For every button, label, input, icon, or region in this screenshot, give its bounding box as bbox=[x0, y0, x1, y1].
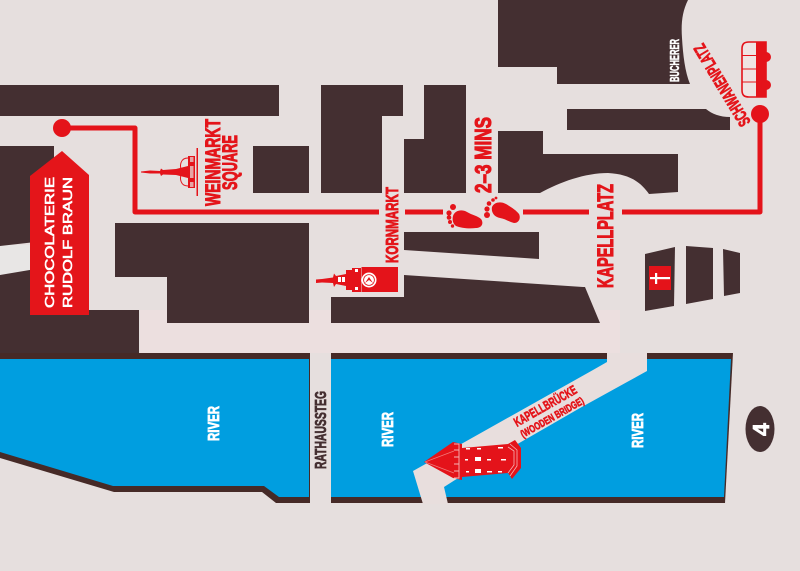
icon: church marker bbox=[649, 266, 671, 290]
rathaussteg label: RATHAUSSTEG bbox=[313, 391, 330, 469]
kapellplatz label: KAPELLPLATZ bbox=[593, 184, 618, 288]
buildings bbox=[0, 0, 740, 353]
river with banks bbox=[0, 353, 733, 503]
chocolaterie tag bbox=[30, 151, 89, 315]
kornmarkt label: KORNMARKT bbox=[382, 187, 402, 263]
weinmarkt label: WEINMARKT bbox=[202, 119, 225, 206]
icon: weinmarkt fountain bbox=[141, 148, 198, 196]
route end marker bbox=[751, 105, 769, 123]
route line bbox=[62, 114, 760, 212]
icon: town hall clock tower bbox=[316, 267, 398, 292]
chocolaterie name: CHOCOLATERIE bbox=[42, 177, 57, 308]
icon: right footprint bbox=[484, 197, 520, 223]
route start marker bbox=[53, 119, 71, 137]
kapellbrücke label: (WOODEN BRIDGE) bbox=[519, 395, 586, 441]
page number badge: 4 bbox=[748, 423, 774, 436]
kapellbrücke label: KAPELLBRÜCKE bbox=[511, 382, 580, 430]
icon: water tower bbox=[424, 440, 521, 480]
river labels bbox=[206, 406, 647, 448]
bucherer label: BUCHERER bbox=[668, 39, 682, 82]
icon: left footprint bbox=[446, 204, 482, 228]
weinmarkt label bbox=[202, 119, 242, 206]
river labels: RIVER bbox=[630, 413, 647, 448]
duration label: 2–3 MINS bbox=[470, 117, 496, 193]
river labels: RIVER bbox=[206, 406, 223, 441]
footbridge road bbox=[413, 353, 647, 504]
rudolf braun name: RUDOLF BRAUN bbox=[60, 177, 75, 308]
page number badge bbox=[746, 406, 774, 452]
weinmarkt label: SQUARE bbox=[219, 135, 242, 190]
kapellbrücke label bbox=[511, 382, 586, 441]
icon: bus bbox=[742, 42, 771, 97]
river labels: RIVER bbox=[380, 412, 397, 447]
